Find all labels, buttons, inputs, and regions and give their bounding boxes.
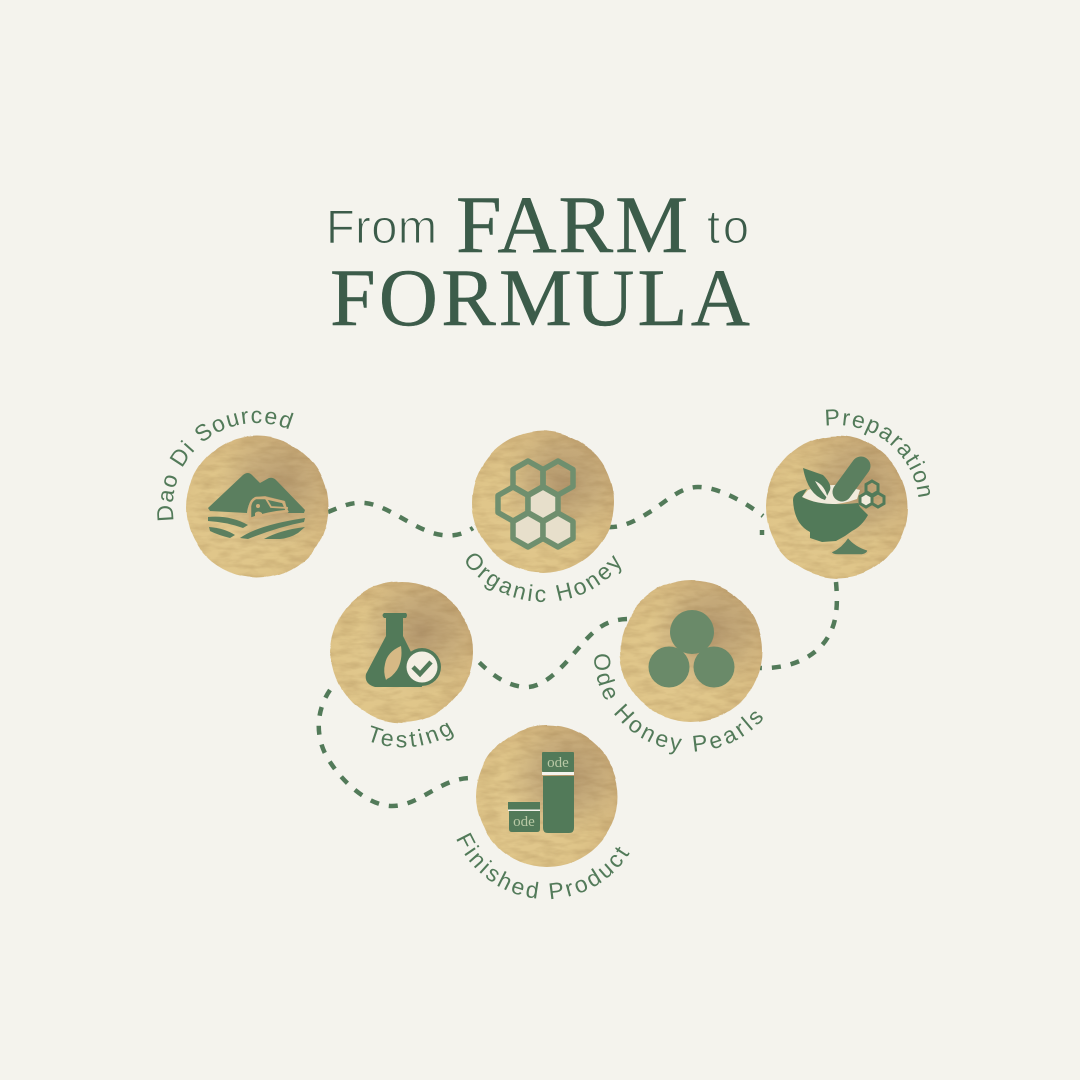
- label: [173, 423, 300, 521]
- step 5: Ode Honey Pearls: Ode Honey Pearls: [594, 654, 763, 754]
- icon: ode bottle and jar: ode: [547, 755, 569, 771]
- step 4: Testing: [330, 582, 473, 748]
- dashed route connecting the steps: [319, 487, 837, 806]
- watercolor disc: [186, 436, 328, 578]
- label: [594, 654, 775, 751]
- watercolor disc: [331, 581, 473, 723]
- step 1: Dao Di Sourced: Dao Di Sourced: [157, 410, 294, 520]
- label: [366, 727, 462, 747]
- title: From: [326, 200, 437, 253]
- step 6: Finished Product: Finished Product: [456, 832, 630, 900]
- step 6: Finished Product: [456, 724, 630, 900]
- title: FARM: [456, 179, 688, 270]
- step 2: Organic Honey: [466, 430, 622, 602]
- title: FORMULA: [330, 252, 750, 343]
- step 5: Ode Honey Pearls: [594, 580, 763, 754]
- icon: ode bottle and jar: ode: [513, 814, 535, 830]
- label: [456, 824, 642, 899]
- icon: ode bottle and jar: [508, 752, 574, 833]
- title: [326, 179, 750, 343]
- label: [825, 425, 919, 507]
- label: [463, 550, 631, 602]
- watercolor disc: [766, 436, 908, 578]
- step 3: Preparation: [766, 409, 930, 579]
- icon: farm with mountains and barn: [208, 473, 305, 539]
- step 3: Preparation: Preparation: [826, 409, 930, 497]
- step 1: Dao Di Sourced: [157, 410, 328, 578]
- icon: three honey pearls: [648, 610, 734, 688]
- watercolor disc: [472, 431, 614, 573]
- watercolor disc: [620, 580, 762, 722]
- icon: honeycomb: [498, 461, 573, 547]
- title: to: [707, 200, 749, 253]
- step 4: Testing: Testing: [370, 722, 454, 748]
- icon: mortar, pestle, leaves, honeycomb, powder: [793, 466, 884, 555]
- step 2: Organic Honey: Organic Honey: [466, 554, 622, 602]
- icon: flask with leaf and check: [366, 613, 441, 687]
- watercolor disc: [476, 725, 618, 867]
